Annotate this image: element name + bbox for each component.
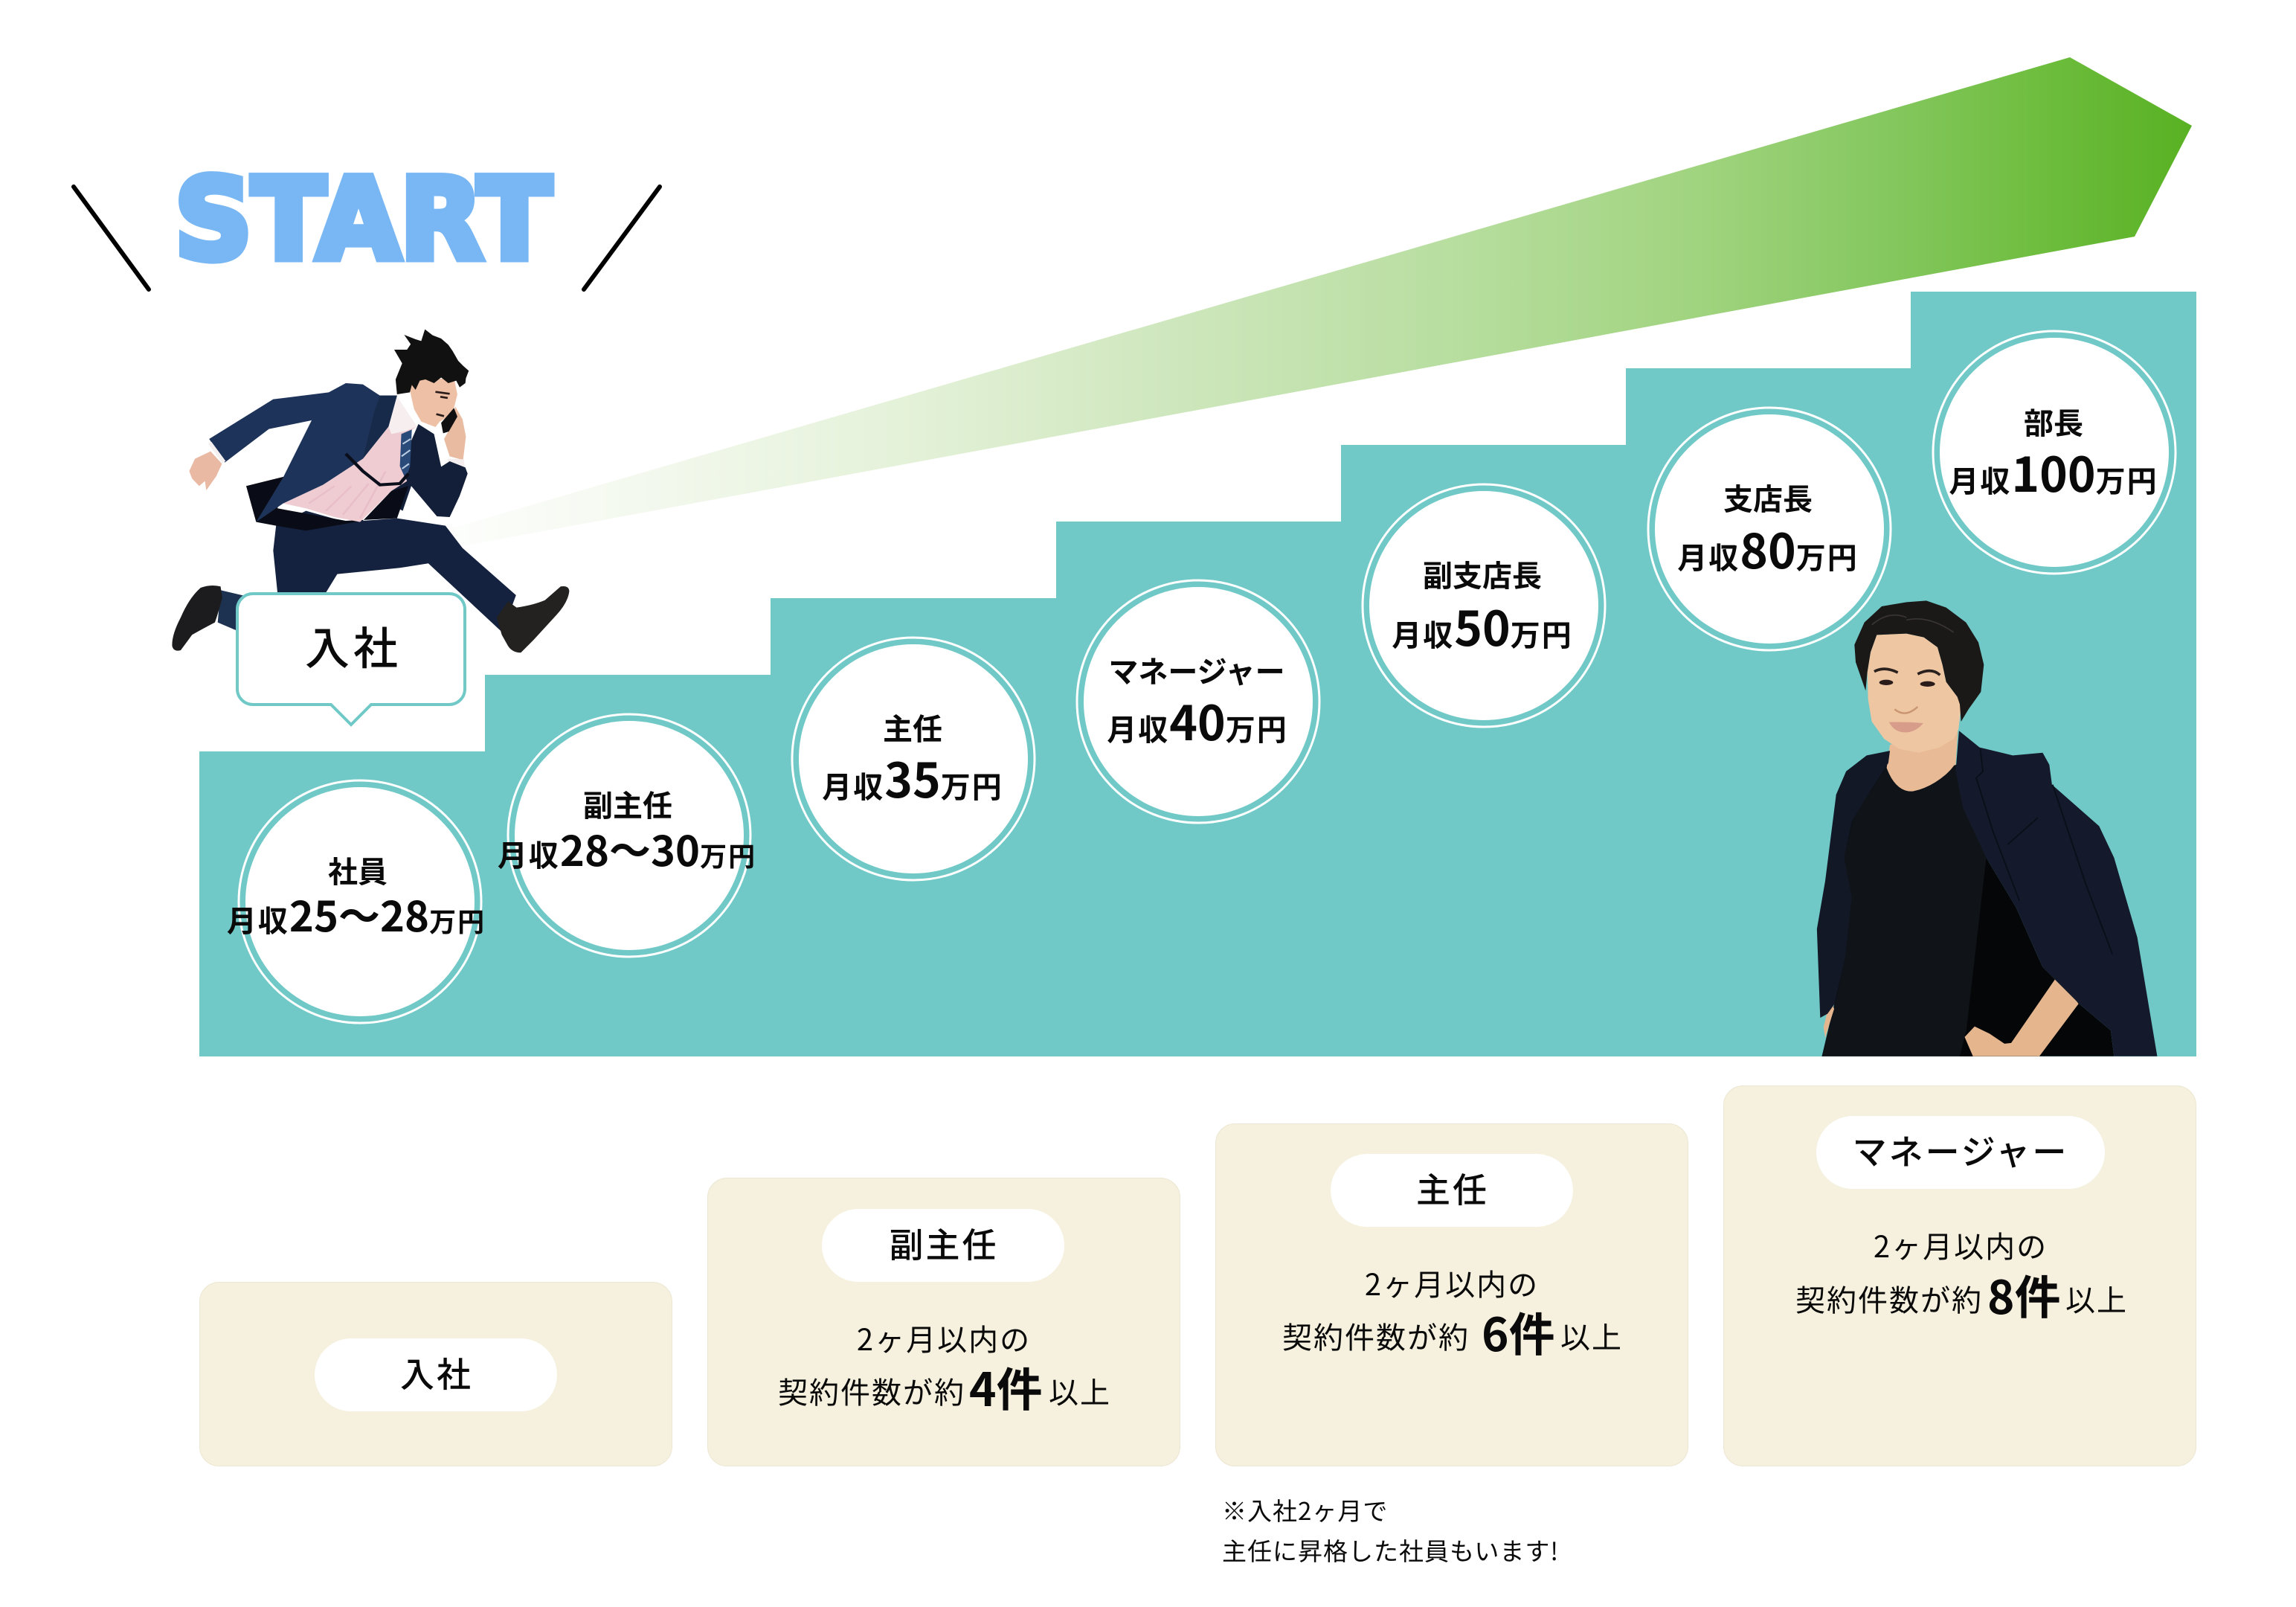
step 4 circle: マネージャー <box>1077 580 1319 823</box>
card: 副主任: 2ヶ月以内の <box>857 1316 1031 1359</box>
black t-shirt <box>1822 765 2080 1056</box>
card: 副主任 <box>708 1178 1180 1466</box>
card: マネージャー: マネージャー <box>1853 1126 2068 1175</box>
staircase background <box>199 292 2196 1056</box>
step 2 circle: 副主任: 月収28〜30万円 <box>498 818 756 879</box>
step 6 circle: 支店長 <box>1648 408 1891 650</box>
card: 入社: 入社 <box>400 1348 473 1397</box>
lapel <box>363 396 397 459</box>
step 1 circle: 社員: 社員 <box>328 848 388 891</box>
jacket <box>209 383 397 522</box>
card: マネージャー: 以上 <box>2065 1277 2128 1320</box>
left shoe <box>172 586 222 651</box>
step 7 circle: 部長 <box>1933 331 2176 574</box>
brows <box>1874 669 1940 675</box>
right shoe and sock <box>497 586 569 652</box>
lapel fold <box>1976 748 2112 954</box>
card: 主任: 契約件数が約 <box>1282 1314 1470 1357</box>
shirt <box>283 397 417 522</box>
step 4 circle: マネージャー: 月収40万円 <box>1107 686 1288 754</box>
card: マネージャー: 2ヶ月以内の <box>1874 1223 2048 1266</box>
footnote: 主任に昇格した社員もいます! <box>1222 1532 1559 1568</box>
card: 主任: 以上 <box>1560 1314 1623 1357</box>
left lower leg <box>218 590 244 630</box>
step 5 circle: 副支店長: 副支店長 <box>1423 552 1542 595</box>
step 5 circle: 副支店長 <box>1363 484 1605 727</box>
forearm and hand <box>1964 975 2079 1056</box>
step 7 circle: 部長: 月収100万円 <box>1949 437 2158 506</box>
waist shadow <box>246 476 408 530</box>
body <box>1817 728 2157 1056</box>
card: 主任: 6件 <box>1482 1298 1555 1364</box>
step 3 circle: 主任: 主任 <box>883 705 942 748</box>
card: マネージャー: 8件 <box>1987 1260 2061 1327</box>
mouth <box>1889 722 1923 732</box>
lanyard <box>346 454 408 485</box>
card: 副主任: 以上 <box>1049 1369 1111 1412</box>
title: START with accent lines: START <box>175 155 551 285</box>
tie <box>400 429 412 479</box>
phone <box>441 408 457 433</box>
card: 主任 <box>1215 1123 1688 1466</box>
neck <box>1887 728 1958 792</box>
hair <box>394 330 469 394</box>
hair <box>1854 600 1984 722</box>
speech bubble: 入社: 入社 <box>305 613 402 678</box>
cuff <box>210 443 224 462</box>
left hand <box>1824 1005 1834 1038</box>
step 5 circle: 副支店長: 月収50万円 <box>1392 591 1573 660</box>
rear jacket side <box>386 424 468 517</box>
jacket left side <box>1817 751 1890 1018</box>
card: 主任: 主任 <box>1416 1164 1489 1213</box>
card: 入社 <box>199 1283 672 1466</box>
card: 主任: 2ヶ月以内の <box>1365 1261 1539 1304</box>
jacket right side <box>1955 731 2157 1056</box>
card: マネージャー: 契約件数が約 <box>1795 1277 1983 1320</box>
shirt folds <box>309 471 386 519</box>
illustration: standing man in black <box>1817 600 2157 1056</box>
card: 副主任: 契約件数が約 <box>778 1369 965 1412</box>
back hand <box>189 452 222 490</box>
jacket interior <box>1960 858 2114 1056</box>
ear <box>1961 679 1976 707</box>
step 6 circle: 支店長: 支店長 <box>1723 475 1813 519</box>
dark torso silhouette <box>1822 765 2080 1056</box>
step 6 circle: 支店長: 月収80万円 <box>1677 514 1859 583</box>
brow, eye and mouth <box>435 392 450 416</box>
footnote <box>1222 1492 1559 1568</box>
card: 副主任: 副主任 <box>890 1219 998 1268</box>
footnote: ※入社2ヶ月で <box>1222 1492 1388 1527</box>
card: マネージャー <box>1724 1086 2196 1466</box>
title: START with accent lines <box>74 155 660 289</box>
step 4 circle: マネージャー: マネージャー <box>1108 648 1285 691</box>
hair highlights <box>1872 615 1954 632</box>
step 1 circle: 社員: 月収25〜28万円 <box>227 884 486 944</box>
step 3 circle: 主任 <box>792 638 1035 880</box>
step 2 circle: 副主任: 副主任 <box>583 782 672 825</box>
step 7 circle: 部長: 部長 <box>2024 400 2083 443</box>
step 1 circle: 社員 <box>227 780 486 1023</box>
step 3 circle: 主任: 月収35万円 <box>822 743 1003 812</box>
eyes <box>1879 680 1893 685</box>
illustration: jumping businessman on phone <box>172 330 569 652</box>
hand on phone <box>444 407 466 474</box>
speech bubble: 入社 <box>237 594 465 725</box>
card: 副主任: 4件 <box>969 1353 1043 1420</box>
gradient growth arrow <box>446 57 2192 549</box>
trousers <box>273 511 516 632</box>
face <box>409 378 457 427</box>
nose <box>1894 707 1917 713</box>
step 2 circle: 副主任 <box>498 714 756 957</box>
head <box>1854 600 1984 753</box>
